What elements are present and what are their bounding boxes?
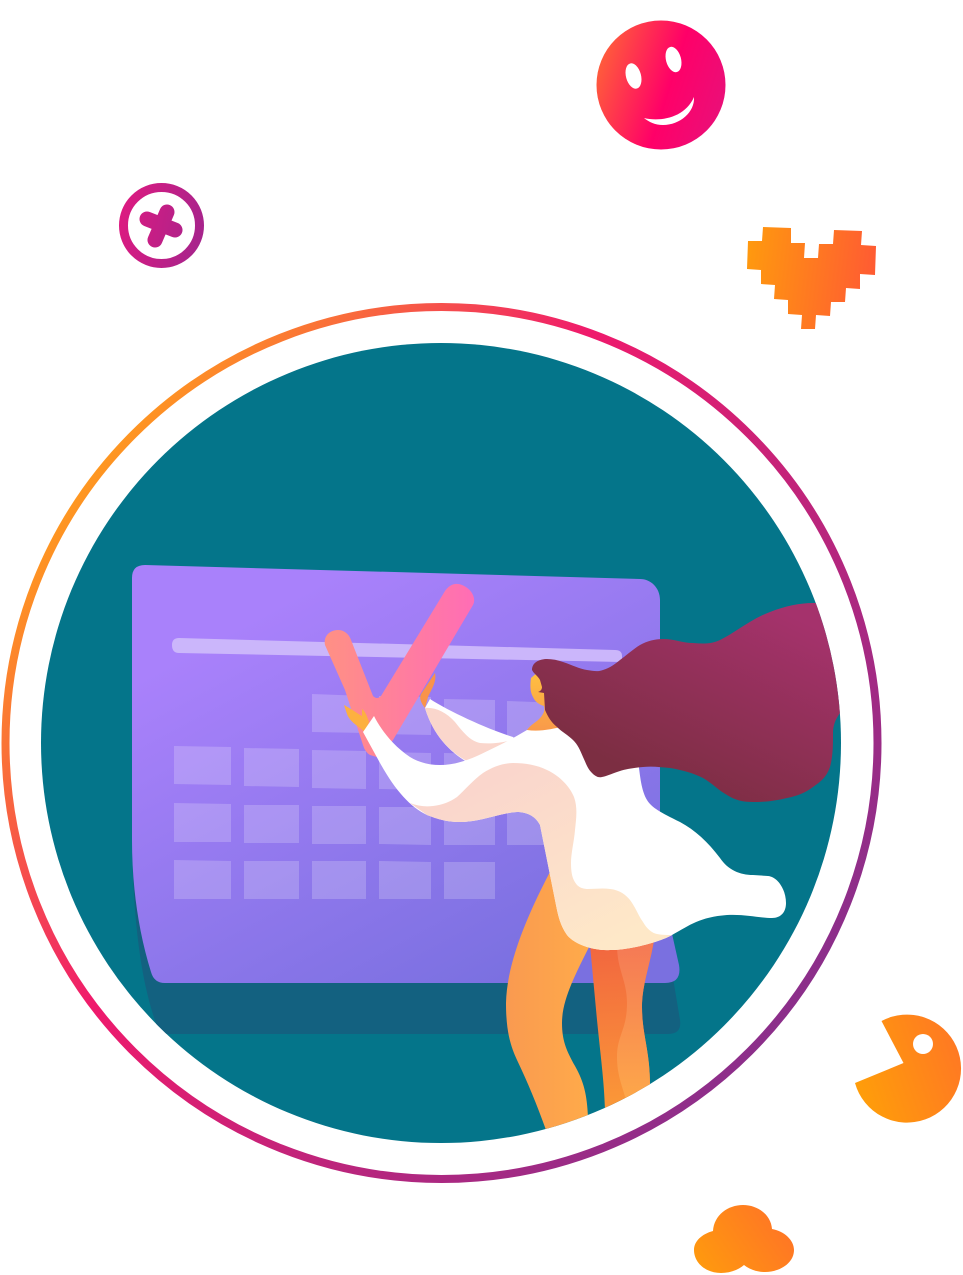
head and neck <box>527 674 558 731</box>
smiley right eye <box>663 45 684 74</box>
back sleeve shadow <box>425 708 508 761</box>
smiley mouth <box>644 97 694 125</box>
calendar shadow <box>132 850 680 1034</box>
pacman body <box>855 1015 961 1123</box>
plus button icon <box>124 188 200 264</box>
pixel heart icon <box>747 227 876 329</box>
calendar board <box>132 565 679 983</box>
back leg shade <box>590 940 654 1110</box>
back leg <box>590 940 654 1110</box>
cloud icon <box>694 1205 794 1273</box>
back sleeve <box>425 699 520 762</box>
back hand <box>420 673 435 708</box>
dress shadow <box>410 763 672 950</box>
button ring <box>124 188 200 264</box>
calendar header bar <box>172 638 622 662</box>
smiley left eye <box>623 62 644 90</box>
smiley icon <box>596 20 726 150</box>
dress body and front sleeve <box>363 716 786 950</box>
checkmark <box>325 584 474 758</box>
calendar scene <box>132 565 850 1130</box>
teal disc <box>41 343 841 1143</box>
front hand <box>344 705 369 732</box>
smiley face <box>596 20 726 150</box>
pacman eye <box>913 1034 933 1054</box>
calendar date cells <box>174 694 560 899</box>
back leg highlight <box>617 940 654 1100</box>
gradient ring <box>6 307 878 1179</box>
pacman icon <box>855 1015 961 1123</box>
cross mark <box>147 212 175 240</box>
hair <box>532 603 850 802</box>
front leg <box>506 868 590 1130</box>
